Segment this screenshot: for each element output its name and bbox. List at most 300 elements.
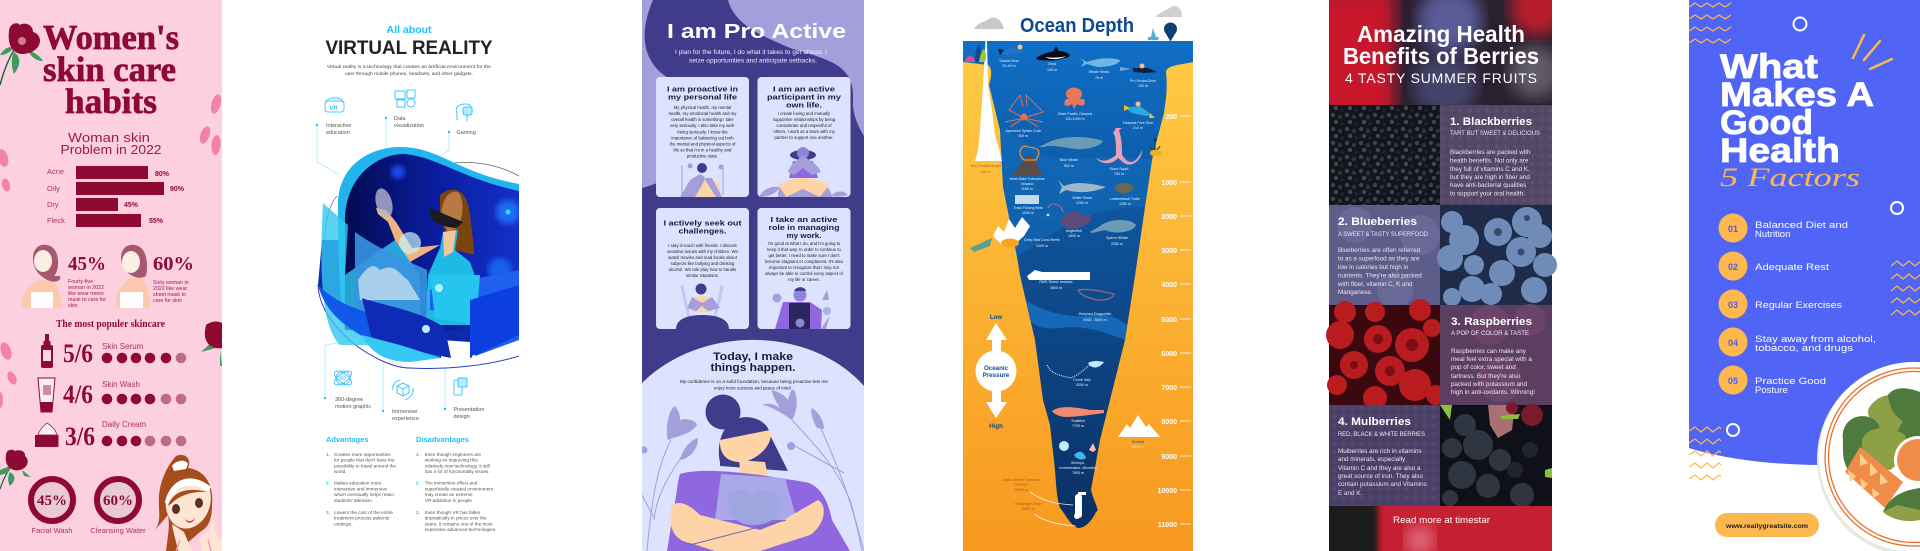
- bar chart: skin problems: Fleck: [47, 216, 65, 225]
- labels: sea life: Pro Scuba Diver: [1130, 79, 1157, 83]
- illustration: meditating figure: [760, 147, 848, 197]
- text panel: mulberries: great source of iron. They also: [1338, 473, 1423, 480]
- icon: VR headset: [325, 98, 344, 112]
- panel: virtual reality: [316, 25, 520, 532]
- panel: I am pro active: [640, 0, 864, 551]
- animal: microbes and shrimp: [1059, 441, 1096, 459]
- column: advantages: treatment process patients: [334, 516, 390, 520]
- heading: today I make things happen: [710, 351, 796, 374]
- text panel: blueberries: Blueberries are often referred: [1338, 247, 1421, 254]
- labels: sea life: 500 m: [1064, 164, 1074, 168]
- column: advantages: students' attention.: [334, 498, 373, 503]
- title: Amazing Health: [1357, 21, 1525, 47]
- illustration: woman resting arms: [680, 163, 724, 197]
- labels: sea life: Japanese Spider Crab: [1005, 129, 1041, 133]
- labels: sea life: Deep Sea Coral Reefs: [1024, 238, 1060, 242]
- text panel: blueberries: low in calories but high in: [1338, 264, 1409, 271]
- tower: Burj Khalifa: [975, 41, 1002, 161]
- card: seek challenges: I actively seek out: [664, 218, 742, 228]
- decorative pink petals: [0, 93, 223, 408]
- column: advantages: interactive and immersive: [334, 486, 388, 492]
- text panel: raspberries: tartness. But they're also: [1451, 373, 1521, 380]
- animal: spider crab: [1005, 95, 1043, 127]
- labels: sea life: White Shark: [1072, 196, 1092, 200]
- column: disadvantages: working on improving this: [425, 458, 478, 462]
- factor 04: 04: [1728, 338, 1738, 348]
- labels: sea life: Blue Whale: [1060, 158, 1078, 162]
- depth scale: [1158, 114, 1191, 529]
- photo: blackberries: [1329, 105, 1440, 205]
- card: managing my work: I take an active: [770, 215, 838, 224]
- burj label: 830 m: [981, 170, 991, 174]
- text panel: raspberries: A POP OF COLOR & TASTE: [1451, 331, 1529, 337]
- labels: sea life: Whale Shark: [1089, 70, 1109, 74]
- lighter water layers: [1000, 130, 1152, 257]
- column: advantages: for people that don't have the: [334, 458, 395, 462]
- labels: deep records: Depth James Cameron: [1003, 478, 1039, 482]
- animal: dragonfish: [1078, 289, 1114, 300]
- text: forty five percent note: like wear neem: [68, 291, 104, 297]
- zigzags: top left: [1689, 3, 1731, 43]
- card: seek challenges: subjects like bullying and drinking: [671, 261, 735, 266]
- factor 02: 02: [1728, 262, 1738, 272]
- card: personal life: health, my emotional health and my: [669, 111, 737, 116]
- animal: blue whale: [1039, 137, 1103, 149]
- donut: cleansing water 60 percent: Cleansing Water: [90, 526, 146, 535]
- depth scale: 2000: [1161, 214, 1177, 221]
- labels: upper applications: Gaming: [456, 130, 476, 136]
- deep sea coral reef: [970, 217, 1030, 252]
- labels: upper applications: Data: [394, 116, 407, 122]
- icon: 360 degree: [334, 370, 352, 386]
- text panel: raspberries: high in anti-oxidants. Winning!: [1451, 389, 1535, 396]
- shipwreck: RMS Titanic: [1027, 270, 1090, 280]
- factor 05: [1718, 366, 1826, 396]
- card: active participant: I create loving and mutually: [778, 111, 831, 116]
- labels: lower applications: design: [454, 414, 470, 420]
- illustration: smiling girl: [155, 455, 222, 551]
- labels: sea life: Giant Squid: [1110, 167, 1128, 171]
- illustration: yoga pose: [676, 284, 729, 329]
- text: forty five percent note: Fourty-five: [68, 279, 93, 285]
- title: Health: [1720, 132, 1840, 170]
- text panel: blackberries: they full of vitamins C and K,: [1450, 166, 1530, 173]
- card: active participant: [758, 77, 850, 197]
- column: disadvantages: 3.: [416, 510, 420, 515]
- text panel: blackberries: but they are high in fiber and: [1450, 174, 1530, 181]
- coral top: [965, 44, 986, 62]
- depth scale: 10000: [1158, 488, 1177, 495]
- bar chart: skin problems: 45%: [124, 202, 139, 209]
- animal: octopus: [1064, 88, 1085, 109]
- text: sixty percent note: 2022 like wear: [153, 286, 187, 292]
- rating: skin wash: [63, 381, 186, 404]
- bar chart: skin problems: Acne: [47, 167, 64, 176]
- card: personal life: very seriously. I also take my well-: [670, 123, 736, 128]
- depth scale: 11000: [1158, 522, 1177, 529]
- column: disadvantages: has a lot of functionality issues.: [425, 469, 490, 474]
- card: managing my work: important to recognize that I may not: [769, 265, 840, 270]
- labels: sea life: Deepest Free Dive: [1123, 121, 1153, 125]
- bar chart: skin problems: 90%: [170, 186, 185, 193]
- icon: woman with neem mask: [22, 245, 61, 308]
- icon: serum bottle: [41, 334, 53, 368]
- animal: scuba diver: [998, 44, 1024, 56]
- zigzags: right: [1891, 261, 1920, 315]
- burj label: [971, 164, 1001, 174]
- factor 02: Adequate Rest: [1755, 262, 1829, 273]
- labels: sea life: 1000 m: [1022, 211, 1034, 215]
- rating: skin serum: 5/6: [63, 339, 93, 368]
- column: disadvantages: Even though VR has fallen: [425, 510, 481, 515]
- illustration: plants: [642, 420, 864, 551]
- title: [1343, 21, 1539, 69]
- animal: whale shark: [1080, 58, 1120, 67]
- donut: cleansing water 60 percent: [90, 479, 146, 535]
- labels: sea life: RMS Titanic remains: [1039, 280, 1073, 284]
- text: forty five percent note: woman in 2022: [68, 285, 104, 291]
- text panel: mulberries: contain potassium and Vitamins: [1338, 481, 1427, 488]
- factor 01: Nutrition: [1755, 229, 1790, 240]
- labels: sea life: 2400 m: [1036, 244, 1048, 248]
- factor 03: Regular Exercises: [1755, 300, 1842, 311]
- panel: women's skin care habits: [0, 0, 223, 551]
- text panel: mulberries: Vitamin C and they are also a: [1338, 465, 1421, 472]
- labels: deep records: Challenger Deep: [1015, 502, 1041, 506]
- labels: lower applications: Immersive: [392, 409, 417, 415]
- card: seek challenges: challenges.: [678, 226, 726, 236]
- text panel: blueberries: A SWEET & TASTY SUPERFOOD: [1338, 232, 1429, 238]
- title: Ocean Depth: [1020, 15, 1134, 37]
- card: personal life: life so that I'm in a healthy and: [674, 148, 732, 152]
- donut: facial wash 45 percent: [31, 479, 73, 535]
- labels: sea life: 1165 m: [1021, 187, 1033, 191]
- labels: lower applications: 360-degree: [335, 397, 363, 403]
- chart heading: [62, 132, 161, 154]
- icon: daily cream jar: [35, 423, 58, 447]
- text panel: raspberries: meal feel extra special with a: [1451, 356, 1532, 363]
- labels: sea life: Deepsea Dragonfish: [1079, 312, 1111, 316]
- subtitle script: 5 Factors: [1720, 163, 1860, 192]
- animal: anglerfish: [1047, 204, 1091, 229]
- donut: facial wash 45 percent: 45%: [37, 493, 67, 509]
- labels: sea life: Scuba Diver: [999, 59, 1020, 63]
- bar chart: skin problems: 55%: [149, 218, 164, 225]
- title: Good: [1720, 104, 1813, 142]
- text panel: blackberries: health benefits. Not only are: [1450, 158, 1529, 164]
- website pill: www.reallygreatsite.com: [1725, 523, 1808, 530]
- labels: sea life: Anglerfish: [1066, 229, 1082, 233]
- card: managing my work: always be able to control every aspect of: [765, 271, 844, 276]
- accent strokes: [1853, 35, 1892, 69]
- bar chart: skin problems: 80%: [155, 171, 170, 178]
- depth scale: 7000: [1161, 385, 1177, 392]
- depth scale: 6000: [1161, 351, 1177, 358]
- factor 04: tobacco, and drugs: [1755, 343, 1853, 354]
- card: seek challenges: alcohol. We role play how to handle: [669, 267, 737, 272]
- leaves: [1888, 395, 1920, 450]
- column: disadvantages: may create an extreme: [425, 492, 473, 497]
- icon: location pin: [1164, 22, 1177, 42]
- text panel: blueberries: to as a superfood as they are: [1338, 256, 1420, 262]
- labels: sea life: Invertebrates, Microbes: [1059, 466, 1097, 470]
- column: disadvantages: relatively new technology, it still: [425, 464, 490, 468]
- column: advantages: 2.: [326, 480, 330, 486]
- animal: snailfish: [1052, 407, 1104, 417]
- card: managing my work: become stagnant or complacent. It's also: [765, 259, 844, 264]
- diagram: oceanic pressure: Low: [990, 314, 1002, 321]
- depth scale: 9000: [1161, 454, 1177, 461]
- icon: top flower: [0, 23, 43, 85]
- title: Women's: [43, 18, 179, 57]
- labels: sea life: Shrimps,: [1071, 461, 1085, 465]
- column: disadvantages: Disadvantages: [416, 435, 469, 444]
- column: disadvantages: [416, 435, 496, 532]
- labels: sea life: 1280 m: [1119, 202, 1131, 206]
- column: advantages: Creates more opportunities: [334, 452, 391, 457]
- submersible: [1074, 492, 1086, 519]
- card: active participant: considerate and respectful of: [776, 123, 832, 128]
- photo: blueberries: [1437, 205, 1557, 306]
- layer near 4000 metres: [1026, 301, 1127, 340]
- donut: cleansing water 60 percent: 60%: [103, 493, 133, 509]
- blue background: [1689, 0, 1920, 465]
- water trench: [963, 41, 1193, 528]
- column: advantages: 1.: [326, 452, 330, 457]
- text panel: blackberries: have anti-bacterial qualities: [1450, 182, 1526, 189]
- stat: 60 percent: 60%: [153, 253, 194, 275]
- photo: mulberries: [1440, 402, 1552, 507]
- text: sixty percent note: care for skin: [153, 298, 182, 304]
- labels: sea life: Giant Pacific Octopus: [1058, 112, 1092, 116]
- card: personal life: being seriously. I know the: [677, 130, 728, 134]
- diagram: oceanic pressure: Pressure: [983, 372, 1010, 379]
- title: What: [1720, 48, 1818, 86]
- text panel: mulberries: 4. Mulberries: [1338, 416, 1411, 428]
- factor 05: Posture: [1755, 385, 1788, 396]
- rating: daily cream: 3/6: [65, 422, 95, 451]
- card: managing my work: keep it that way. In order to continue to: [767, 247, 841, 252]
- bar chart: skin problems: [47, 166, 185, 227]
- text panel: blackberries: TART BUT SWEET & DELICIOUS: [1450, 131, 1540, 137]
- animal: free diver: [1124, 102, 1155, 118]
- text panel: raspberries: 3. Raspberries: [1451, 316, 1532, 328]
- icon: anchor: [1150, 137, 1162, 156]
- card: seek challenges: [656, 208, 749, 329]
- factor 03: 03: [1728, 300, 1738, 310]
- card: personal life: importance of balancing out both: [671, 136, 734, 140]
- factor 01: [1718, 214, 1848, 242]
- stat: 45 percent: 45%: [68, 253, 106, 275]
- depth scale: 4000: [1161, 282, 1177, 289]
- card: managing my work: my life or career.: [788, 277, 820, 282]
- rating: skin serum: [64, 343, 186, 364]
- card: personal life: overall health is something I take: [671, 117, 734, 122]
- icon: presentation phone: [454, 378, 467, 395]
- subtitle: [675, 49, 827, 64]
- icon: sailboat: [1148, 28, 1159, 40]
- labels: sea life: 1600 m: [1068, 234, 1080, 238]
- animal: sperm whale: [1090, 220, 1136, 233]
- icon: VR headset: VR: [330, 106, 339, 112]
- labels: sea life: 750 m: [1114, 172, 1124, 176]
- labels: sea life: Leatherback Turtle: [1110, 197, 1140, 201]
- labels: deep records: reached: [1014, 482, 1028, 486]
- card: seek challenges: similar situations.: [686, 273, 719, 278]
- text: sixty percent note: [153, 280, 189, 304]
- labels: sea life: Comb Jelly: [1073, 378, 1091, 382]
- column: disadvantages: 1.: [416, 452, 420, 457]
- text panel: blueberries: [1329, 205, 1440, 308]
- factor 03: [1718, 290, 1842, 318]
- heading: most popular skincare: The most populer skincare: [56, 318, 165, 330]
- zigzags: bottom left: [1689, 427, 1721, 480]
- column: advantages: world.: [334, 469, 347, 474]
- bar chart: skin problems: Dry: [47, 200, 59, 209]
- card: active participant: I am an active: [773, 84, 835, 94]
- text: sixty percent note: sheet mask to: [153, 292, 186, 298]
- labels: deep records: 10927 m: [1021, 507, 1035, 511]
- labels: lower applications: experience: [392, 416, 419, 422]
- text panel: mulberries: [1329, 405, 1440, 506]
- card: managing my work: role in managing: [768, 223, 840, 232]
- labels: sea life: 4000 - 5000 m: [1083, 318, 1107, 322]
- text panel: blueberries: nutrients. They're also packed: [1338, 272, 1422, 280]
- text: introduction: Virtual reality is a technology that creates an artificial environment for the: [327, 64, 492, 69]
- labels: sea life: West Mata Submarine: [1009, 177, 1045, 181]
- animal: giant squid: [1096, 128, 1142, 165]
- labels: sea life: 100 m: [1047, 68, 1057, 72]
- column: advantages: Makes education more: [334, 480, 382, 486]
- card: personal life: the mental and physical aspects of: [670, 142, 736, 146]
- column: advantages: undergo.: [334, 522, 353, 526]
- card: personal life: my personal life: [668, 93, 737, 102]
- labels: sea life: Sperm Whale: [1106, 236, 1128, 240]
- icon: 360 degree: 360: [338, 376, 347, 382]
- trawl fishing net: [1015, 195, 1039, 204]
- labels: lower applications: [335, 397, 484, 422]
- illustration: leaves: [640, 389, 824, 460]
- labels: sea life: 300 m: [1018, 134, 1028, 138]
- text panel: mulberries: Mulberries are rich in vitamins: [1338, 448, 1422, 455]
- chart heading: Woman skin: [68, 130, 150, 145]
- subtitle: seize opportunities and anticipate setbacks.: [689, 58, 817, 64]
- labels: sea life: 214 m: [1133, 126, 1143, 130]
- pointer lines: [1030, 492, 1076, 526]
- title: skin care: [43, 50, 176, 89]
- bar chart: skin problems: Oily: [47, 184, 60, 193]
- rating: skin serum: Skin Serum: [102, 342, 144, 351]
- column: advantages: which eventually helps retain: [334, 492, 394, 497]
- heading: today I make things happen: things happen.: [710, 362, 796, 374]
- icon: woman with sheet mask: [116, 245, 149, 308]
- icon: immersive cube: [393, 380, 413, 400]
- text panel: mulberries: and minerals, especially: [1338, 456, 1406, 463]
- card: active participant: participant in my: [767, 93, 842, 102]
- illustration: food plate: [1817, 362, 1920, 551]
- text: introduction: [327, 64, 492, 76]
- panel: ocean depth: [963, 6, 1193, 551]
- mountain: Everest: Everest: [1132, 440, 1144, 444]
- volcano: [1013, 146, 1042, 175]
- chart heading: Problem in 2022: [60, 142, 162, 157]
- icon: right cloud: [1155, 6, 1182, 17]
- rating: skin wash: Skin Wash: [102, 380, 140, 389]
- closing panel circle: [642, 340, 864, 551]
- labels: sea life: 5200 m: [1076, 383, 1088, 387]
- animal: turtle: [1115, 183, 1133, 193]
- footer text: Read more at timestar: [1393, 515, 1490, 526]
- labels: sea life: 100 m: [1138, 84, 1148, 88]
- depth scale: 8000: [1161, 419, 1177, 426]
- heading: all about: All about: [386, 25, 432, 36]
- text: forty five percent note: skin: [68, 303, 77, 309]
- callout lines: [317, 118, 449, 411]
- text: forty five percent note: mask to care for: [68, 297, 106, 303]
- labels: upper applications: education: [326, 130, 350, 136]
- text panel: blackberries: Blackberries are packed with: [1450, 149, 1531, 156]
- diagram: oceanic pressure: Oceanic: [984, 365, 1009, 372]
- labels: sea life: 7900 m: [1072, 471, 1084, 475]
- labels: sea life: 100-1000 m: [1065, 117, 1085, 121]
- labels: deep records: 10908 m: [1014, 488, 1028, 492]
- card: managing my work: my work.: [786, 231, 822, 240]
- labels: upper applications: visualization: [394, 123, 424, 129]
- column: advantages: Advantages: [326, 435, 369, 444]
- text panel: blackberries: 1. Blackberries: [1450, 116, 1532, 128]
- panel: what makes a good health: [1689, 0, 1920, 551]
- column: disadvantages: VR-addiction in people.: [425, 498, 473, 503]
- card: managing my work: [758, 208, 850, 329]
- illustration: self-hugging woman: [667, 394, 850, 551]
- labels: upper applications: [326, 116, 476, 136]
- donut: facial wash 45 percent: Facial Wash: [32, 526, 72, 535]
- text panel: blueberries: with fiber, vitamin C, K and: [1337, 281, 1413, 288]
- column: disadvantages: years, it remains one of the most: [425, 522, 493, 526]
- icon: data visualization: [395, 90, 415, 107]
- card: managing my work: I'm good at what I do, and I'm going to: [768, 241, 841, 246]
- text panel: blackberries: to support your oral health.: [1450, 190, 1525, 198]
- factor 05: Practice Good: [1755, 376, 1826, 387]
- callout dots: [316, 117, 450, 412]
- heading: today I make things happen: Today, I make: [713, 351, 793, 363]
- labels: sea life: 3800 m: [1050, 286, 1062, 290]
- header blurred photo: [1315, 0, 1566, 120]
- labels: lower applications: motion graphic: [335, 404, 371, 410]
- depth scale: 1000: [1161, 180, 1177, 187]
- column: disadvantages: superficially created environment: [425, 486, 494, 492]
- card: personal life: [656, 77, 749, 197]
- labels: sea life: 70 m: [1095, 76, 1103, 80]
- column: advantages: Lowers the cost of the entire: [334, 510, 393, 515]
- card: personal life: I am proactive in: [667, 84, 739, 94]
- subtitle: 4 TASTY SUMMER FRUITS: [1345, 70, 1537, 86]
- factor 04: Stay away from alcohol,: [1755, 334, 1876, 345]
- card: seek challenges: sensitive issues with my children. We: [667, 249, 739, 254]
- woman hair and body: [440, 190, 474, 255]
- labels: sea life: Orca: [1048, 62, 1056, 66]
- factor 04: [1718, 328, 1876, 356]
- icon: left cloud: [974, 17, 1004, 29]
- title: virtual reality: VIRTUAL REALITY: [326, 38, 493, 59]
- labels: sea life: 2250 m: [1111, 242, 1123, 246]
- text: sixty percent note: Sixty woman in: [153, 280, 189, 286]
- labels: sea life: 20-40 m: [1002, 64, 1016, 68]
- rating: daily cream: Daily Cream: [102, 420, 146, 429]
- text: forty five percent note: [68, 279, 106, 309]
- depth scale: 5000: [1161, 317, 1177, 324]
- burj label: Burj Khalifa Height: [971, 164, 1001, 168]
